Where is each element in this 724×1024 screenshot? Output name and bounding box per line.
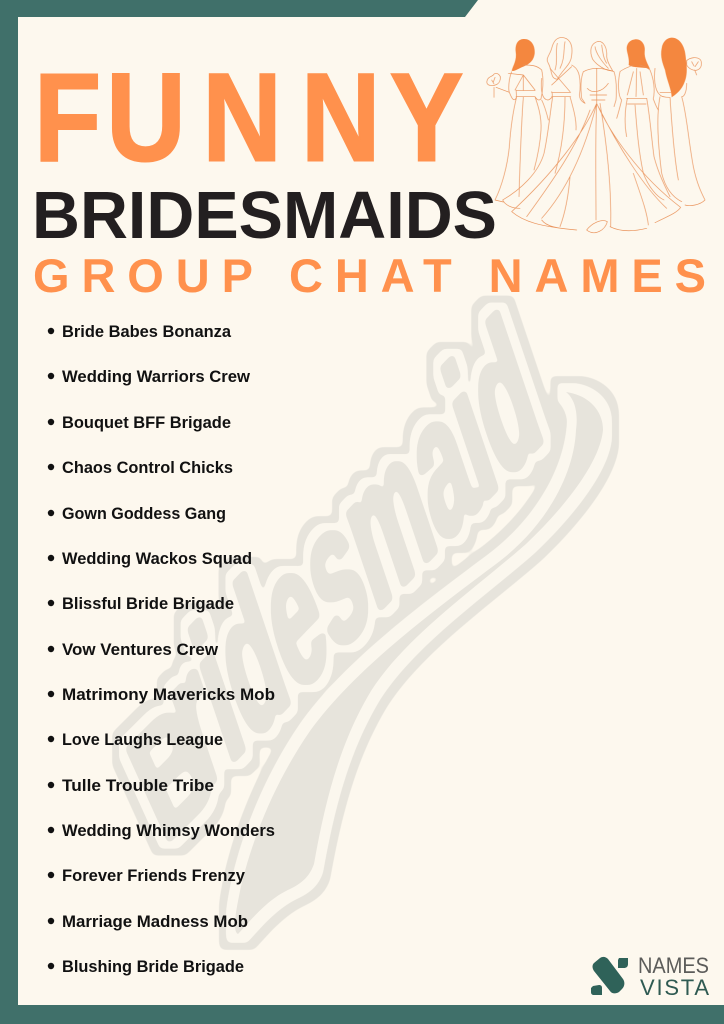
watermark: Bridesmaid script with swoosh: B xyxy=(110,670,234,874)
list item 13: Forever Friends Frenzy xyxy=(62,866,246,885)
list item 9: Matrimony Mavericks Mob xyxy=(62,685,275,704)
watermark: Bridesmaid script with swoosh: B xyxy=(110,670,234,874)
watermark: Bridesmaid script with swoosh: ridesmaid xyxy=(145,274,559,834)
logo: Names Vista xyxy=(591,953,709,1000)
list item 14: Marriage Madness Mob xyxy=(62,912,248,931)
logo text: NAMES xyxy=(638,953,709,978)
woman 2 xyxy=(503,65,585,208)
woman 4 xyxy=(617,65,670,200)
list item 2: Wedding Warriors Crew xyxy=(62,367,251,386)
list item 4: Chaos Control Chicks xyxy=(62,458,233,477)
list item 10: Love Laughs League xyxy=(62,730,223,749)
logo: Names Vista: VISTA xyxy=(640,975,709,1000)
bride xyxy=(512,68,681,233)
subheading: GROUP CHAT NAMES: GROUP CHAT NAMES xyxy=(33,249,706,302)
bouquets xyxy=(487,58,701,97)
list item 3: Bouquet BFF Brigade xyxy=(62,413,231,432)
title: FUNNY: FUNNY xyxy=(34,47,463,187)
list item 6: Wedding Wackos Squad xyxy=(62,549,252,568)
illustration: bridal party xyxy=(487,38,705,233)
list item 5: Gown Goddess Gang xyxy=(62,504,226,523)
woman 5 xyxy=(655,68,705,206)
list item 1: Bride Babes Bonanza xyxy=(62,322,232,341)
watermark: Bridesmaid script with swoosh: ridesmaid xyxy=(145,274,559,834)
watermark: Bridesmaid script with swoosh: ridesmaid xyxy=(145,274,559,834)
list item 11: Tulle Trouble Tribe xyxy=(62,776,214,795)
watermark: Bridesmaid script with swoosh: ridesmaid xyxy=(145,274,559,834)
watermark: Bridesmaid script with swoosh: B xyxy=(110,670,234,874)
list item 12: Wedding Whimsy Wonders xyxy=(62,821,275,840)
list item 7: Blissful Bride Brigade xyxy=(62,594,234,613)
watermark: Bridesmaid script with swoosh: B xyxy=(110,670,234,874)
list item 8: Vow Ventures Crew xyxy=(62,640,219,659)
list: group chat names xyxy=(48,322,275,976)
heading: BRIDESMAIDS: BRIDESMAIDS xyxy=(32,178,497,253)
woman 1 xyxy=(495,65,548,202)
icon: logo mark xyxy=(591,957,628,995)
hair xyxy=(512,38,687,97)
list item 15: Blushing Bride Brigade xyxy=(62,957,244,976)
